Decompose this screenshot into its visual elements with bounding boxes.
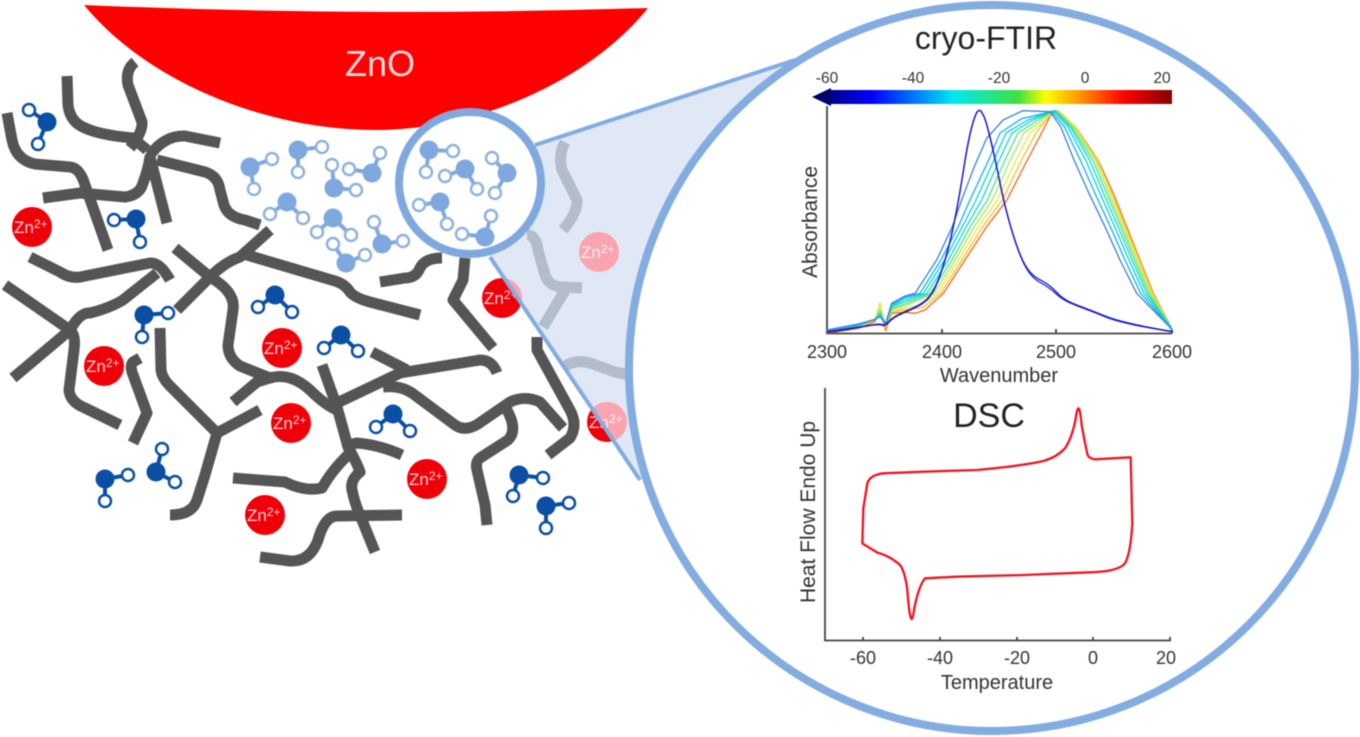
zinc ions: Zn [86, 357, 106, 376]
chart: DSC thermogram: Temperature [941, 672, 1053, 694]
zinc ions: 2+ [106, 356, 120, 370]
zoom cone: Zn [581, 243, 601, 262]
ZnO particle: ZnO [345, 43, 415, 84]
chart: DSC thermogram: 20 [1156, 648, 1176, 668]
zinc ions: 2+ [284, 338, 298, 352]
chart: DSC thermogram: -60 [850, 648, 876, 668]
chart: cryo-FTIR spectra: 2500 [1036, 342, 1076, 362]
chart: cryo-FTIR spectra: Absorbance [799, 166, 822, 278]
colorbar [812, 70, 1172, 106]
colorbar: -40 [902, 70, 925, 87]
title: cryo-FTIR: cryo-FTIR [915, 20, 1057, 56]
chart: cryo-FTIR spectra: 2600 [1152, 342, 1192, 362]
colorbar: -60 [816, 70, 839, 87]
zinc ions: 2+ [504, 288, 518, 302]
chart: DSC thermogram [797, 388, 1176, 694]
chart: DSC thermogram: 0 [1088, 648, 1098, 668]
bulk water molecules [23, 104, 575, 534]
ZnO particle [84, 5, 648, 130]
zoom cone [488, 58, 795, 482]
zinc ions: Zn [273, 414, 293, 433]
chart: cryo-FTIR spectra: 2300 [807, 342, 847, 362]
chart: DSC thermogram: -40 [927, 648, 953, 668]
title: DSC: DSC [953, 397, 1025, 435]
zoom cone: Zn [589, 413, 609, 432]
zinc ions: Zn [484, 289, 504, 308]
zinc ions: 2+ [429, 469, 443, 483]
chart: cryo-FTIR spectra: Wavenumber [940, 365, 1058, 387]
zoom cone: 2+ [601, 242, 615, 256]
interfacial water molecules [240, 140, 409, 272]
colorbar: 0 [1081, 70, 1090, 87]
zinc ions: Zn [409, 470, 429, 489]
zinc ions: Zn [14, 218, 34, 237]
zinc ions: Zn [247, 506, 267, 525]
chart: DSC thermogram: -20 [1004, 648, 1030, 668]
colorbar: 20 [1153, 70, 1171, 87]
chart: DSC thermogram: Heat Flow Endo Up [797, 421, 820, 603]
zoom cone: 2+ [609, 412, 623, 426]
magnifier large circle [629, 5, 1355, 731]
zinc ions [12, 207, 627, 535]
zinc ions: 2+ [267, 505, 281, 519]
polymer network [5, 62, 574, 561]
zinc ions: 2+ [34, 217, 48, 231]
zinc ions: 2+ [293, 413, 307, 427]
zinc ions: Zn [264, 339, 284, 358]
magnifier small circle [399, 112, 541, 254]
chart: cryo-FTIR spectra [799, 106, 1192, 387]
colorbar: -20 [988, 70, 1011, 87]
chart: cryo-FTIR spectra: 2400 [922, 342, 962, 362]
zinc ions: Zn [589, 413, 609, 432]
zinc ions: 2+ [609, 412, 623, 426]
